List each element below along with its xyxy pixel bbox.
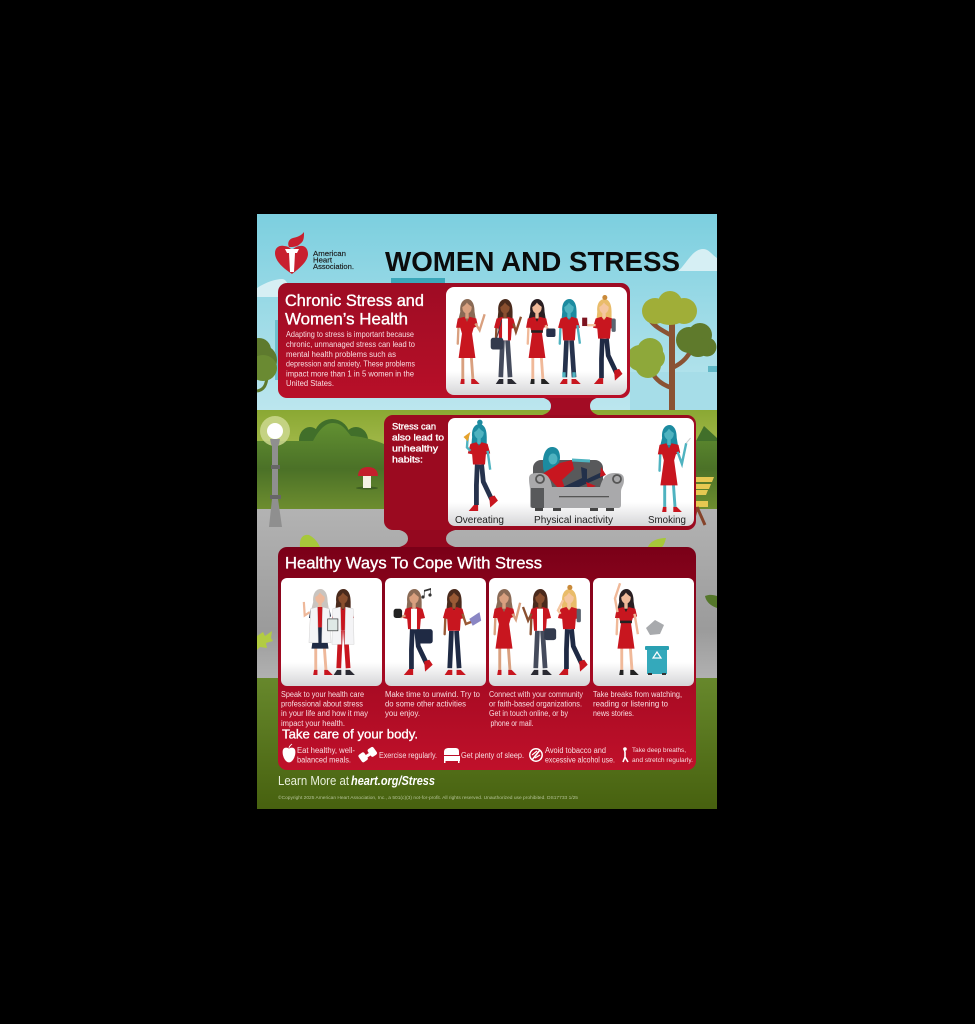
text: organisation name: Association. bbox=[313, 262, 354, 271]
text: take breaks: Take breaks from watching, bbox=[593, 690, 682, 699]
item: exercise: Exercise regularly. bbox=[379, 751, 437, 760]
distant buildings bbox=[275, 278, 720, 411]
text: take breaks bbox=[593, 690, 682, 718]
heading: chronic stress: Chronic Stress and bbox=[285, 292, 424, 310]
card: unhealthy habits bbox=[448, 418, 694, 526]
text: make time to unwind bbox=[385, 690, 481, 718]
item: deep breaths bbox=[623, 747, 693, 764]
figure: stressed teal woman bbox=[558, 299, 581, 384]
text: make time to unwind: do some other activities bbox=[385, 700, 466, 708]
figure: woman reading bbox=[443, 589, 481, 675]
figure: woman waving bbox=[615, 583, 639, 675]
title: WOMEN AND STRESS bbox=[385, 246, 680, 277]
text: connect with community: Get in touch online, or by bbox=[489, 709, 568, 718]
text: connect with community: Connect with your community bbox=[489, 690, 583, 699]
figure: woman with black hair and purse bbox=[526, 299, 555, 384]
heading: stress can lead to unhealthy habits: also lead to bbox=[392, 432, 444, 444]
card: health care professional bbox=[281, 578, 382, 728]
clouds bbox=[257, 249, 717, 297]
card: make time to unwind bbox=[385, 578, 486, 718]
heading: stress can lead to unhealthy habits bbox=[392, 422, 444, 466]
text: speak to health care: professional about stress bbox=[281, 700, 363, 708]
item: avoid tobacco: Avoid tobacco and bbox=[545, 746, 606, 755]
heading: healthy ways: Healthy Ways To Cope With Stress bbox=[285, 554, 542, 572]
text: organisation name: American bbox=[313, 249, 346, 258]
card: five women bbox=[446, 287, 627, 395]
text: speak to health care: Speak to your health care bbox=[281, 690, 364, 699]
panel: unhealthy habits bbox=[384, 415, 696, 548]
logo: American Heart Association bbox=[275, 232, 354, 274]
item: eat healthy: Eat healthy, well- bbox=[297, 746, 355, 755]
figure: blonde woman with cup bbox=[582, 295, 622, 384]
text: chronic stress body: depression and anxiety. These problems bbox=[286, 360, 415, 368]
figure: smoking bbox=[658, 425, 690, 512]
left tree bbox=[257, 338, 277, 392]
icon: newspaper bbox=[646, 620, 664, 635]
item: avoid tobacco bbox=[530, 746, 615, 764]
heading: chronic stress: Women’s Health bbox=[285, 310, 408, 328]
text: speak to health care bbox=[281, 690, 368, 728]
item: deep breaths: and stretch regularly. bbox=[632, 757, 693, 764]
card: connect with community bbox=[489, 578, 590, 728]
text: speak to health care: in your life and how it may bbox=[281, 709, 368, 718]
text: chronic stress body: United States. bbox=[286, 379, 334, 388]
heading: chronic stress bbox=[285, 292, 424, 328]
figure: woman with jacket and bag bbox=[491, 299, 521, 384]
item: eat healthy: balanced meals. bbox=[297, 756, 351, 764]
heading: take care of your body: Take care of your body. bbox=[282, 726, 418, 742]
link: learn more: heart.org/Stress bbox=[351, 774, 435, 788]
heading: stress can lead to unhealthy habits: Stress can bbox=[392, 422, 436, 432]
figure: woman in dress bbox=[493, 589, 520, 675]
item: avoid tobacco: excessive alcohol use. bbox=[545, 756, 615, 764]
text: chronic stress body: impact more than 1 in 5 women in the bbox=[286, 370, 414, 378]
text: make time to unwind: Make time to unwind. Try to bbox=[385, 690, 481, 699]
heading: stress can lead to unhealthy habits: habits: bbox=[392, 454, 423, 466]
text: connect with community: or faith-based organizations. bbox=[489, 700, 582, 708]
mushroom bbox=[356, 467, 378, 490]
text: take breaks: news stories. bbox=[593, 709, 634, 718]
text: connect with community: phone or mail. bbox=[490, 719, 534, 728]
text: connect with community bbox=[489, 690, 583, 728]
text: take breaks: reading or listening to bbox=[593, 700, 669, 708]
text: speak to health care: impact your health. bbox=[281, 719, 345, 728]
fallen leaves bbox=[257, 535, 717, 650]
label: smoking: Smoking bbox=[648, 514, 686, 526]
label: physical inactivity: Physical inactivity bbox=[534, 514, 614, 526]
figure: overeating bbox=[464, 420, 498, 511]
heading: stress can lead to unhealthy habits: unhealthy bbox=[392, 444, 438, 454]
item: sleep bbox=[444, 748, 524, 763]
text: organisation name bbox=[313, 249, 354, 271]
figure: doctors bbox=[304, 589, 355, 675]
item: deep breaths: Take deep breaths, bbox=[632, 747, 686, 754]
text: chronic stress body bbox=[286, 330, 416, 388]
poster background scene bbox=[247, 214, 720, 809]
label: overeating: Overeating bbox=[455, 514, 504, 526]
icon: heart and torch bbox=[275, 232, 308, 274]
text: make time to unwind: you enjoy. bbox=[385, 709, 420, 718]
right tree bbox=[627, 291, 716, 418]
text: chronic stress body: chronic, unmanaged stress can lead to bbox=[286, 340, 416, 349]
bench bbox=[696, 477, 714, 526]
link: learn more: Learn More at bbox=[278, 774, 349, 788]
text: chronic stress body: Adapting to stress is important because bbox=[286, 330, 414, 339]
street lamp bbox=[260, 416, 290, 527]
text: organisation name: Heart bbox=[313, 256, 332, 264]
icon: recycling bin bbox=[645, 646, 669, 675]
hedge bbox=[257, 419, 717, 509]
figure: blonde woman on phone bbox=[558, 585, 588, 675]
copyright: ©Copyright 2025 American Heart Association, Inc., a 501(c)(3) not-for-profit. All rights reserved. Unauthorized use prohibited. DS17733 1/25 bbox=[278, 794, 578, 800]
panel: chronic stress bbox=[278, 283, 630, 416]
item: eat healthy bbox=[283, 744, 355, 764]
text: chronic stress body: mental health problems such as bbox=[286, 350, 396, 359]
figure: woman with bag bbox=[523, 589, 556, 675]
icon: sofa with reclining woman bbox=[529, 447, 624, 511]
figure: woman with headphones bbox=[394, 589, 433, 675]
figure: woman in dress waving bbox=[456, 299, 485, 384]
item: sleep: Get plenty of sleep. bbox=[461, 751, 524, 760]
item: exercise bbox=[358, 746, 437, 763]
panel: healthy ways to cope bbox=[278, 547, 696, 770]
icon: music notes bbox=[421, 588, 432, 599]
card: take breaks from news bbox=[593, 578, 694, 718]
